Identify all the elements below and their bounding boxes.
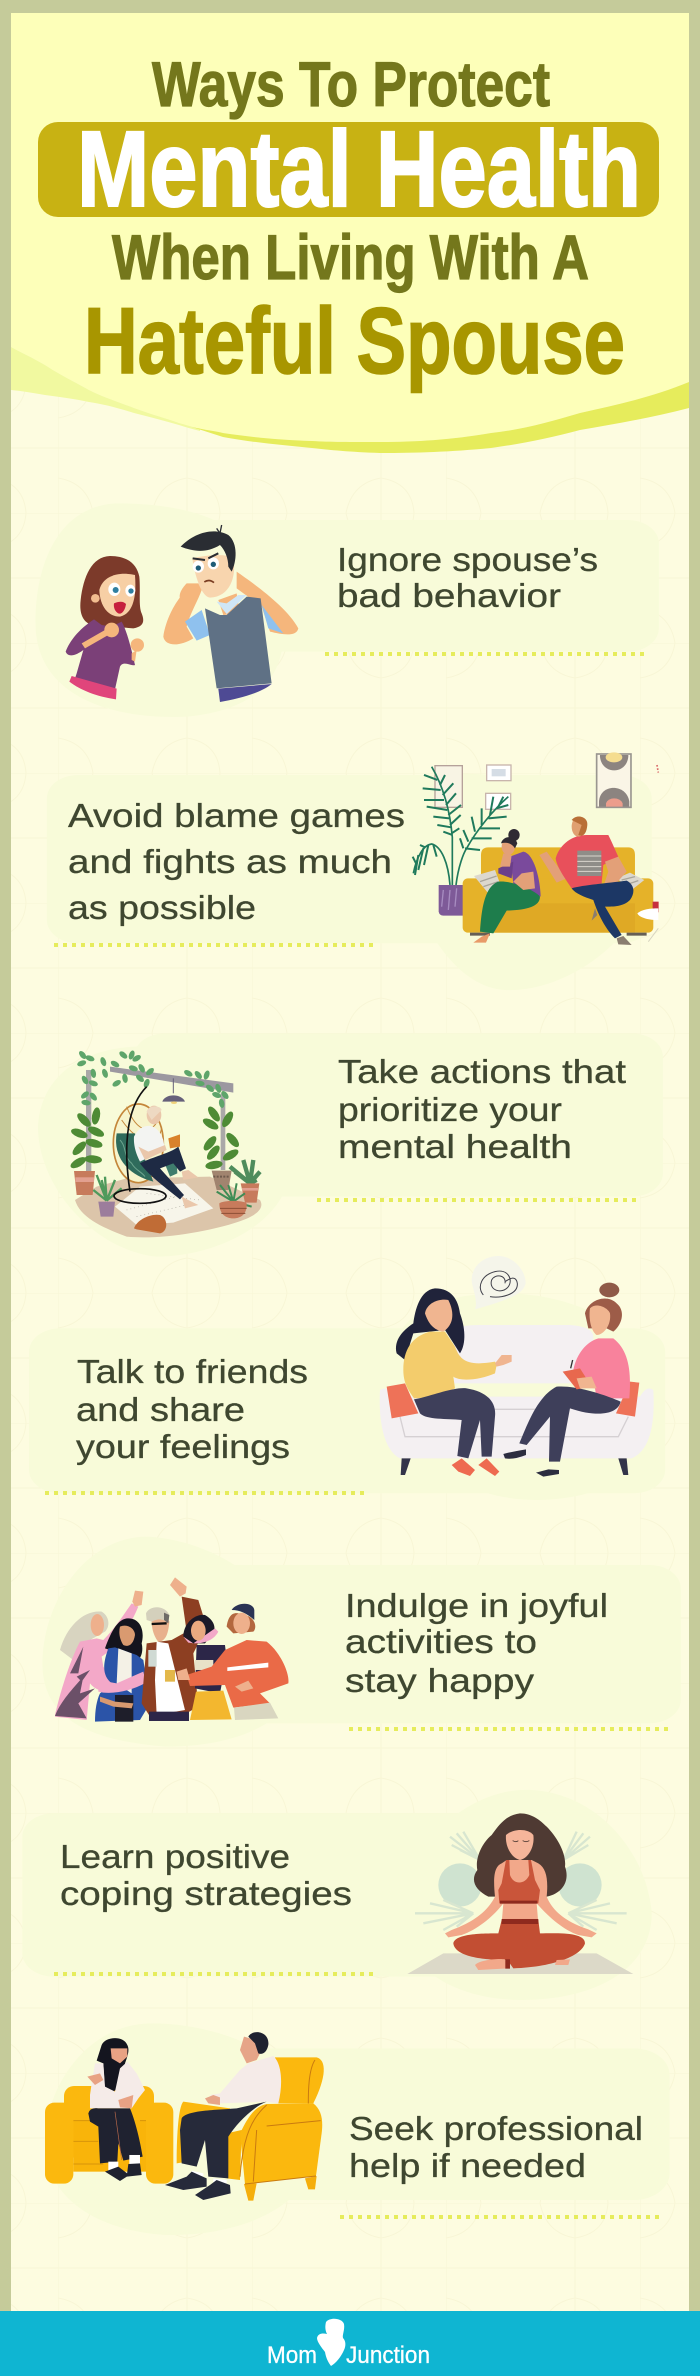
- text: indulge in joyful activities: stay happy: [345, 1662, 535, 1699]
- text: take actions: mental health: [338, 1128, 572, 1165]
- text: avoid blame games: as possible: [68, 889, 256, 926]
- panel: coping strategies: [22, 1790, 652, 2000]
- panel: ignore spouse's bad behavior: [36, 503, 659, 717]
- text: take actions: [338, 1053, 626, 1165]
- panel background: [45, 2023, 670, 2235]
- text: ignore spouse's bad behavior: Ignore spouse’s: [337, 541, 598, 578]
- panel: prioritize mental health: [38, 1033, 663, 1257]
- text: talk to friends: Talk to friends: [77, 1353, 308, 1390]
- text: seek professional help: [349, 2110, 643, 2184]
- panel background: [22, 1790, 652, 2000]
- footer bar with logo: [0, 2311, 700, 2376]
- text: indulge in joyful activities: Indulge in joyful: [345, 1587, 608, 1624]
- panel: avoid blame games: [47, 752, 659, 990]
- text: seek professional help: help if needed: [349, 2147, 586, 2184]
- panel: seek professional help: [45, 2023, 670, 2235]
- panel background: [47, 773, 652, 990]
- text: avoid blame games: [68, 797, 405, 926]
- title: when living with a: When Living With A: [112, 223, 589, 293]
- title: ways to protect: Ways To Protect: [152, 50, 550, 120]
- illustration: person reading in hanging chair: [69, 1050, 261, 1237]
- illustration: woman meditating: [407, 1813, 633, 1974]
- text: talk to friends: and share: [76, 1391, 245, 1428]
- panel: talk to friends: [29, 1256, 665, 1500]
- text: ignore spouse's bad behavior: [337, 541, 598, 614]
- illustration: couple on sofa: [413, 752, 659, 945]
- panel background: [42, 1537, 681, 1747]
- text: learn positive coping strategies: coping strategies: [60, 1875, 352, 1912]
- panel background: [29, 1293, 665, 1500]
- text: learn positive coping strategies: Learn positive: [60, 1838, 290, 1875]
- panel background: [36, 503, 659, 717]
- logo wordmark: Mom: [267, 2342, 317, 2369]
- logo icon: [317, 2319, 345, 2366]
- text: seek professional help: Seek professional: [349, 2110, 643, 2147]
- header panel: [11, 13, 689, 453]
- text: indulge in joyful activities: [345, 1587, 608, 1699]
- text: avoid blame games: and fights as much: [68, 843, 392, 880]
- logo wordmark: Junction: [346, 2342, 430, 2369]
- logo wordmark: [267, 2342, 430, 2369]
- illustration: two women talking on sofa: [380, 1256, 654, 1477]
- text: take actions: Take actions that: [338, 1053, 626, 1090]
- text: talk to friends: your feelings: [76, 1428, 290, 1465]
- text: learn positive coping strategies: [60, 1838, 352, 1912]
- panel: joyful activities: [42, 1537, 681, 1747]
- illustration: group of friends: [55, 1577, 288, 1722]
- text: talk to friends: [76, 1353, 308, 1465]
- illustration: arguing couple: [66, 525, 298, 702]
- text: indulge in joyful activities: activities to: [345, 1623, 537, 1660]
- text: ignore spouse's bad behavior: bad behavior: [337, 577, 561, 614]
- text: avoid blame games: Avoid blame games: [68, 797, 405, 834]
- illustration: therapy session armchairs: [45, 2032, 324, 2201]
- text: take actions: prioritize your: [338, 1091, 562, 1128]
- panel background: [38, 1033, 663, 1257]
